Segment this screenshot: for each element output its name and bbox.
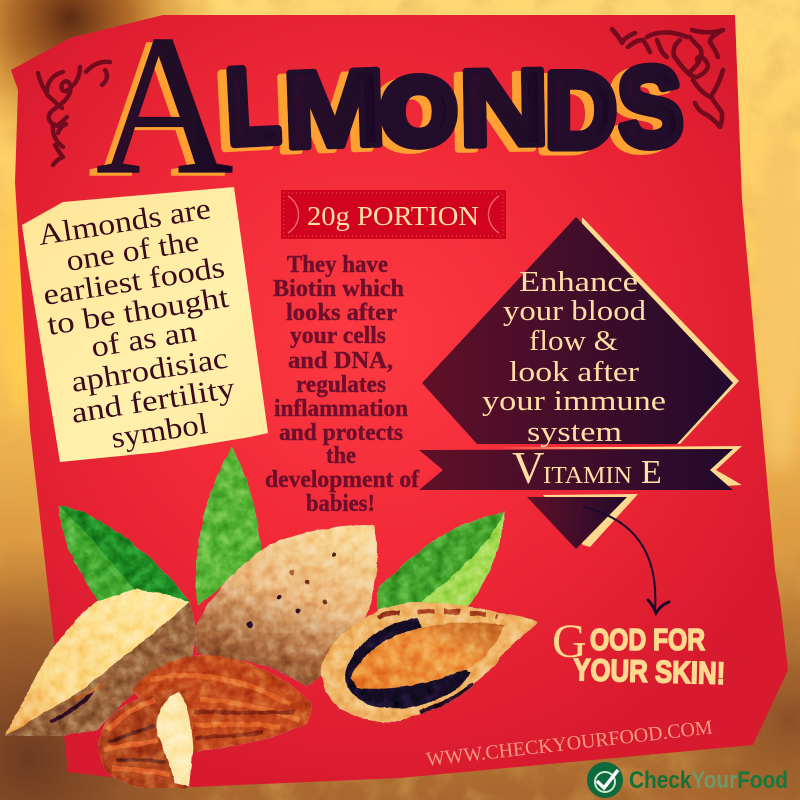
diamond text: look after bbox=[509, 356, 639, 388]
diamond dark shape bbox=[422, 217, 733, 444]
title letters LMONDS bbox=[223, 43, 686, 172]
badge notches bbox=[288, 196, 499, 233]
title: Almonds bbox=[96, 0, 686, 216]
arrow: to skin text bbox=[584, 507, 669, 613]
title letters LMONDS: D bbox=[545, 50, 617, 170]
text block: biotin benefits: the bbox=[326, 443, 356, 469]
almond: red front with chip bbox=[98, 690, 193, 788]
ornament: right corner flourish bbox=[612, 29, 723, 127]
title letters LMONDS: S bbox=[615, 43, 686, 172]
almond: open shell left bbox=[5, 589, 197, 736]
website url: WWW.CHECKYOURFOOD.COM bbox=[425, 716, 714, 771]
diamond cream edge bbox=[580, 217, 739, 444]
text block: biotin benefits: looks after bbox=[286, 300, 397, 326]
note text bbox=[36, 192, 237, 455]
badge text: 20g PORTION bbox=[307, 201, 479, 231]
diamond text: Enhance bbox=[519, 266, 638, 298]
ribbon cream edge bbox=[500, 446, 742, 486]
ribbon text bbox=[512, 443, 662, 493]
diamond text: system bbox=[527, 416, 623, 448]
note text: of as an bbox=[89, 315, 199, 364]
callout: good for your skin: G bbox=[552, 615, 587, 668]
almond: red back bbox=[132, 655, 311, 752]
ribbon text: V bbox=[512, 443, 544, 493]
title letters LMONDS: M bbox=[281, 46, 388, 171]
text block: biotin benefits: and protects bbox=[279, 420, 403, 446]
text block: biotin benefits: development of bbox=[265, 467, 420, 493]
ribbon dark shape bbox=[419, 449, 733, 490]
leaf: left bbox=[59, 506, 190, 604]
ribbon text: E bbox=[641, 454, 662, 491]
note text: earliest foods bbox=[41, 251, 227, 312]
leaf: right bbox=[377, 512, 505, 612]
lower diamond point bbox=[527, 494, 638, 549]
text block: biotin benefits: Biotin which bbox=[273, 276, 404, 302]
note text: to be thought bbox=[45, 281, 232, 342]
text block: biotin benefits: babies! bbox=[306, 491, 375, 517]
title letters LMONDS: L bbox=[223, 44, 283, 167]
ribbon text: ITAMIN bbox=[543, 463, 632, 489]
diamond text bbox=[482, 266, 666, 448]
note text: and fertility bbox=[69, 372, 237, 430]
logo wordmark: CheckYourFood bbox=[629, 767, 788, 794]
diamond text: flow & bbox=[529, 325, 618, 357]
callout: good for your skin: OOD FOR bbox=[590, 622, 705, 657]
illustration: almonds and leaves bbox=[5, 447, 537, 788]
note paper bbox=[22, 187, 268, 462]
logo badge bbox=[587, 762, 623, 798]
badge dotted border bbox=[284, 193, 503, 236]
text block: biotin benefits: inflammation bbox=[274, 396, 408, 422]
badge: 20g portion bbox=[281, 190, 506, 239]
diamond text: your immune bbox=[482, 385, 666, 417]
title letter A: A bbox=[96, 0, 233, 216]
note: almonds history bbox=[22, 187, 268, 462]
diamond: vitamin E benefits bbox=[422, 217, 739, 448]
callout: good for your skin bbox=[552, 615, 726, 691]
text block: biotin benefits: regulates bbox=[296, 372, 386, 398]
text block: biotin benefits: your cells bbox=[290, 323, 386, 349]
diamond text: your blood bbox=[503, 295, 647, 327]
almond: whole centre bbox=[195, 525, 377, 687]
text block: biotin benefits: They have bbox=[287, 252, 388, 278]
note text: one of the bbox=[64, 224, 201, 278]
text block: biotin benefits: and DNA, bbox=[288, 348, 393, 374]
note text: symbol bbox=[109, 407, 210, 455]
ribbon: Vitamin E bbox=[419, 443, 742, 493]
callout: good for your skin: YOUR SKIN! bbox=[573, 652, 726, 691]
title letters LMONDS: O bbox=[382, 59, 456, 163]
title letters LMONDS: N bbox=[457, 47, 551, 170]
logo: Check Your Food bbox=[587, 762, 788, 798]
ornament: left corner flourish bbox=[38, 62, 110, 165]
almond: right split shell bbox=[321, 602, 537, 722]
note text: aphrodisiac bbox=[69, 342, 230, 399]
text block: biotin benefits bbox=[265, 252, 420, 517]
note text: Almonds are bbox=[36, 192, 213, 252]
leaf: centre bbox=[196, 447, 261, 606]
